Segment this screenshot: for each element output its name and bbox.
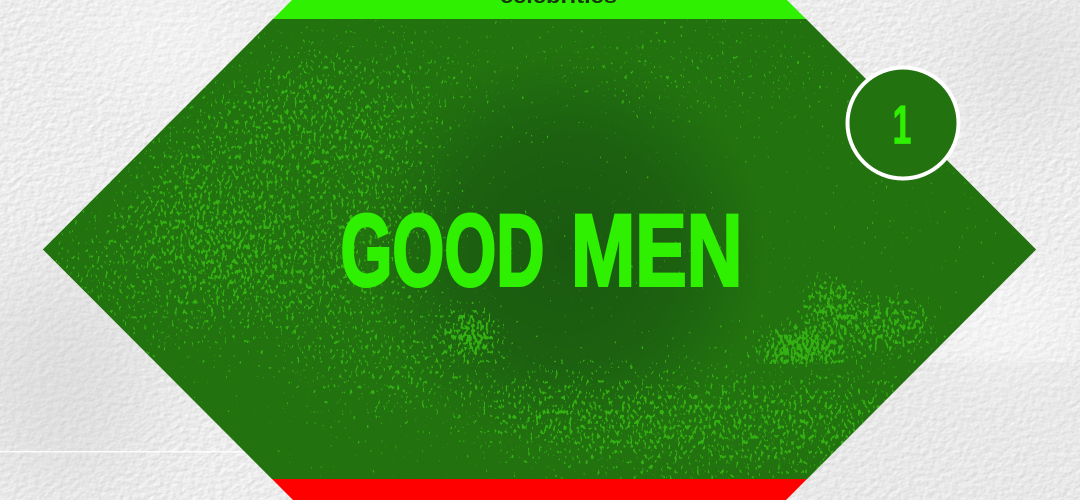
title: MEN (571, 194, 742, 308)
bottom band (270, 479, 810, 500)
badge: number 1: 1 (893, 94, 911, 156)
top band (270, 0, 810, 19)
badge: number 1 (848, 68, 958, 178)
title: GOOD (340, 194, 544, 308)
